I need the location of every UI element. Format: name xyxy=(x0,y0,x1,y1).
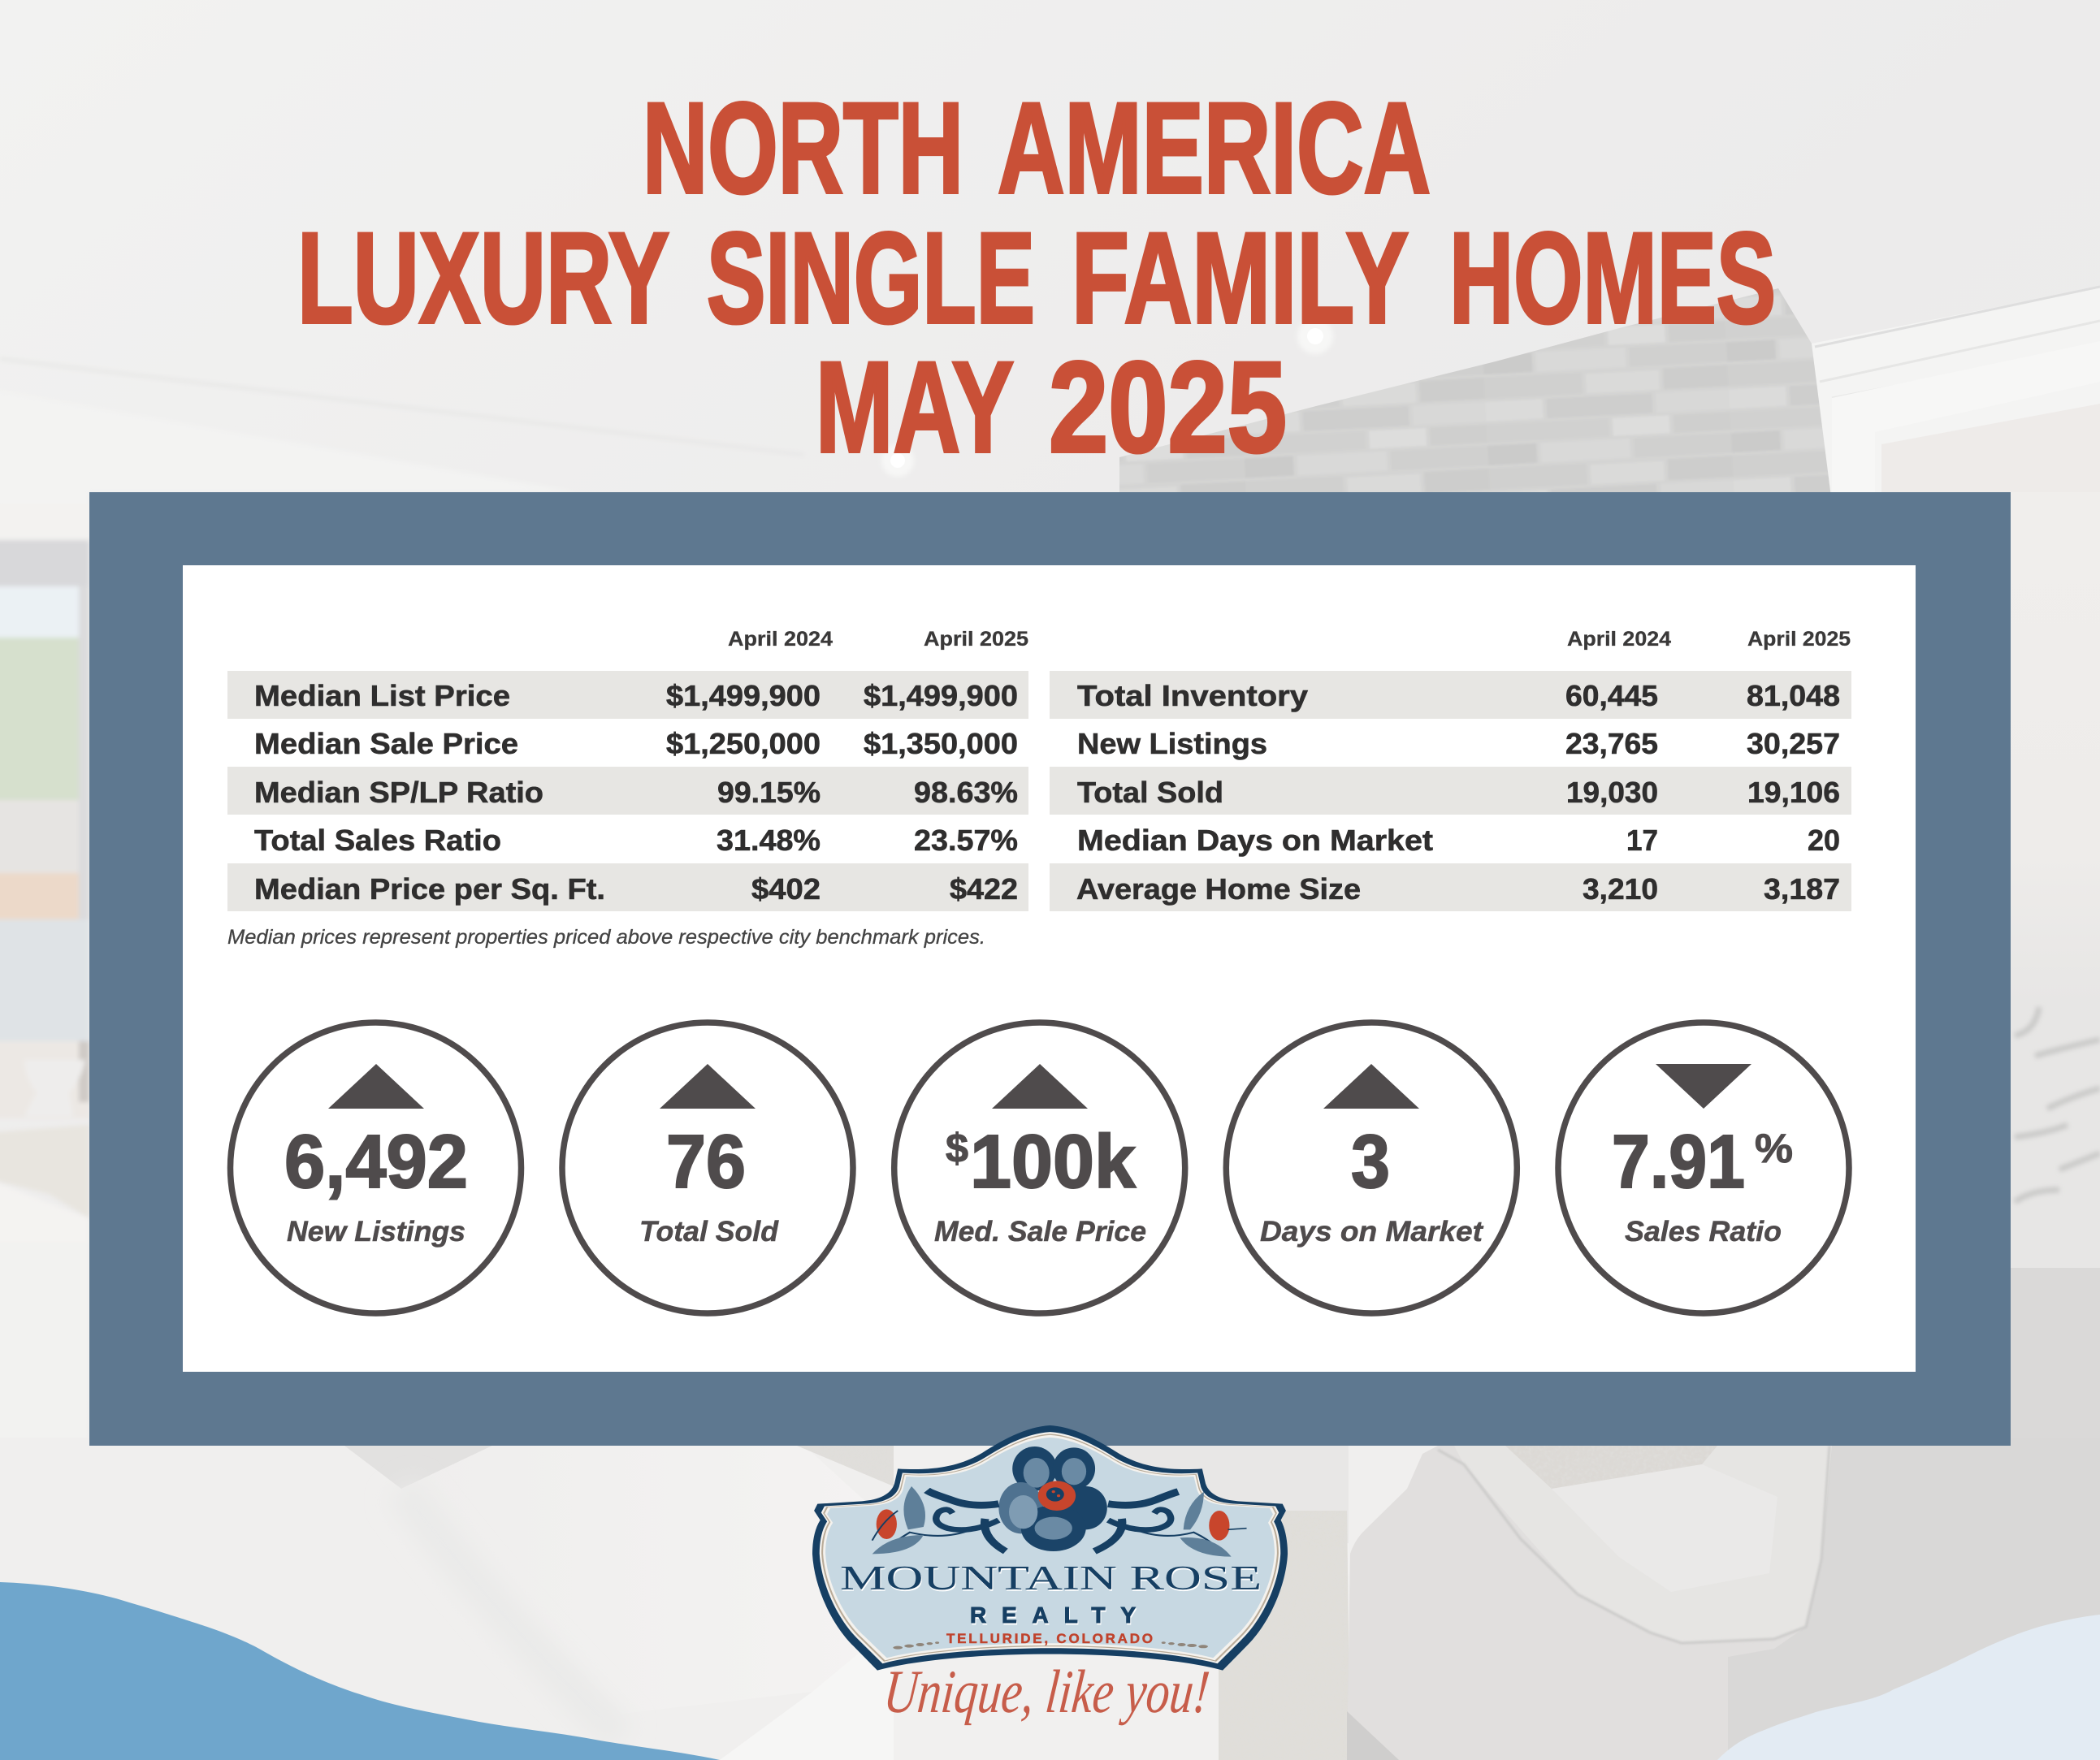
logo text: location: TELLURIDE, COLORADO xyxy=(946,1631,1153,1646)
table: right market activity: New Listings xyxy=(1077,727,1267,760)
table: left market prices: $1,499,900 xyxy=(666,679,821,712)
pillow xyxy=(0,1125,89,1218)
title xyxy=(297,76,1776,479)
table: left market prices: Median Sale Price xyxy=(254,727,518,760)
table: right market activity: Median Days on Market xyxy=(1077,824,1433,857)
table: left market prices: 31.48% xyxy=(717,824,821,857)
table: left market prices: $1,250,000 xyxy=(666,727,821,760)
panel: slate blue frame xyxy=(89,492,2011,1446)
badge shape xyxy=(812,1425,1288,1671)
table: right market activity: April 2024 xyxy=(1567,628,1671,651)
wave: blue lower left xyxy=(0,1582,720,1760)
footnote: Median prices represent properties priced above respective city benchmark prices. xyxy=(227,926,985,949)
stat circle: new listings: 6,492 xyxy=(284,1119,468,1204)
title: AMERICA xyxy=(998,76,1431,220)
stat circle: days on market: Days on Market xyxy=(1260,1216,1483,1248)
lamp base xyxy=(24,1060,85,1117)
table: right market activity: 17 xyxy=(1626,824,1658,857)
table: right market activity: 81,048 xyxy=(1747,679,1840,712)
chair inner back xyxy=(1454,1446,1832,1643)
chair seat cushion xyxy=(1552,1464,1777,1592)
gray wedge behind sofa xyxy=(344,1446,492,1489)
stat circle: sales ratio: % xyxy=(1755,1126,1793,1171)
table: left market prices: $1,350,000 xyxy=(864,727,1018,760)
stat circle: total sold xyxy=(562,1023,853,1313)
title: SINGLE xyxy=(707,205,1035,350)
table: right market activity: 3,210 xyxy=(1583,872,1658,906)
title: HOMES xyxy=(1449,205,1776,350)
stat circle: sales ratio xyxy=(1558,1023,1849,1313)
stat circle: median sale price: 100k xyxy=(970,1119,1136,1204)
table: left market prices: Median Price per Sq. Ft. xyxy=(254,872,605,906)
logo tagline: Unique, like you! xyxy=(881,1658,1213,1726)
table: right market activity: Total Sold xyxy=(1077,776,1223,809)
furniture lower area xyxy=(0,1438,2100,1760)
icon: left scrollwork and blossom xyxy=(872,1486,1006,1554)
title: 2025 xyxy=(1049,335,1287,479)
table: right market activity: Average Home Size xyxy=(1076,872,1361,906)
table: left market prices: $422 xyxy=(950,872,1018,906)
carpet behind logo xyxy=(798,1446,894,1486)
table: right market activity: 23,765 xyxy=(1565,727,1658,760)
icon: rose flower xyxy=(998,1446,1107,1551)
stat circle: days on market: 3 xyxy=(1351,1119,1390,1204)
title: FAMILY xyxy=(1072,205,1409,350)
sofa cushion xyxy=(401,1446,894,1760)
table: right market activity xyxy=(1050,628,1851,911)
table: left market prices: 23.57% xyxy=(914,824,1018,857)
table: right market activity: Total Inventory xyxy=(1077,679,1308,712)
table: left market prices: April 2025 xyxy=(924,628,1028,651)
table lamp shade xyxy=(0,919,89,1041)
carpet behind chair xyxy=(1505,1446,1717,1489)
stat circle: sales ratio: Sales Ratio xyxy=(1625,1216,1782,1248)
table: right market activity: 19,030 xyxy=(1566,776,1658,809)
title: LUXURY xyxy=(297,205,669,350)
logo text: company name: MOUNTAIN ROSE xyxy=(840,1560,1262,1598)
title: NORTH xyxy=(643,76,963,220)
table: right market activity: 19,106 xyxy=(1747,776,1840,809)
stat circle: median sale price: Med. Sale Price xyxy=(934,1216,1146,1248)
stone chimney xyxy=(1119,288,1831,492)
icon: right scrollwork and blossom xyxy=(1094,1492,1247,1557)
ceiling and left crown band xyxy=(0,359,804,544)
table: left market prices: $402 xyxy=(751,872,821,906)
wave: pale lower right xyxy=(1717,1615,2100,1760)
table: right market activity: 20 xyxy=(1808,824,1840,857)
table: right market activity: 60,445 xyxy=(1565,679,1658,712)
crown moulding and right wall xyxy=(1812,287,2100,1004)
window on left xyxy=(0,540,89,1454)
table: right market activity: April 2025 xyxy=(1747,628,1851,651)
table: left market prices: Median List Price xyxy=(254,679,510,712)
stat circle: median sale price xyxy=(894,1023,1185,1313)
table: left market prices: Median SP/LP Ratio xyxy=(254,776,543,809)
stat circle: new listings xyxy=(231,1023,522,1313)
dotted flourishes xyxy=(893,1641,1208,1650)
recessed ceiling lights xyxy=(881,318,1333,477)
table: left market prices: Total Sales Ratio xyxy=(254,824,501,857)
panel: white stats card xyxy=(183,565,1916,1372)
armchair body xyxy=(1347,1446,1832,1760)
stat circle: days on market xyxy=(1226,1023,1517,1313)
table: left market prices: 99.15% xyxy=(717,776,821,809)
logo text: realty: REALTY xyxy=(970,1602,1136,1628)
table: left market prices: 98.63% xyxy=(914,776,1018,809)
table: right market activity: 30,257 xyxy=(1747,727,1840,760)
stat circle: median sale price: $ xyxy=(946,1126,968,1171)
table: left market prices: April 2024 xyxy=(728,628,833,651)
table: right market activity: 3,187 xyxy=(1764,872,1840,906)
tufted sofa at right xyxy=(2007,999,2100,1463)
stat circle: total sold: 76 xyxy=(666,1119,746,1204)
logo: Mountain Rose Realty badge xyxy=(812,1425,1288,1726)
table: left market prices: $1,499,900 xyxy=(864,679,1018,712)
room right of chair xyxy=(1722,1438,2100,1760)
title: MAY xyxy=(816,335,1014,479)
stat circle: new listings: New Listings xyxy=(287,1216,465,1248)
carpet right of logo xyxy=(1210,1511,1353,1760)
table: left market prices xyxy=(227,628,1028,911)
stat circle: total sold: Total Sold xyxy=(639,1216,779,1248)
stat circle: sales ratio: 7.91 xyxy=(1612,1119,1745,1204)
